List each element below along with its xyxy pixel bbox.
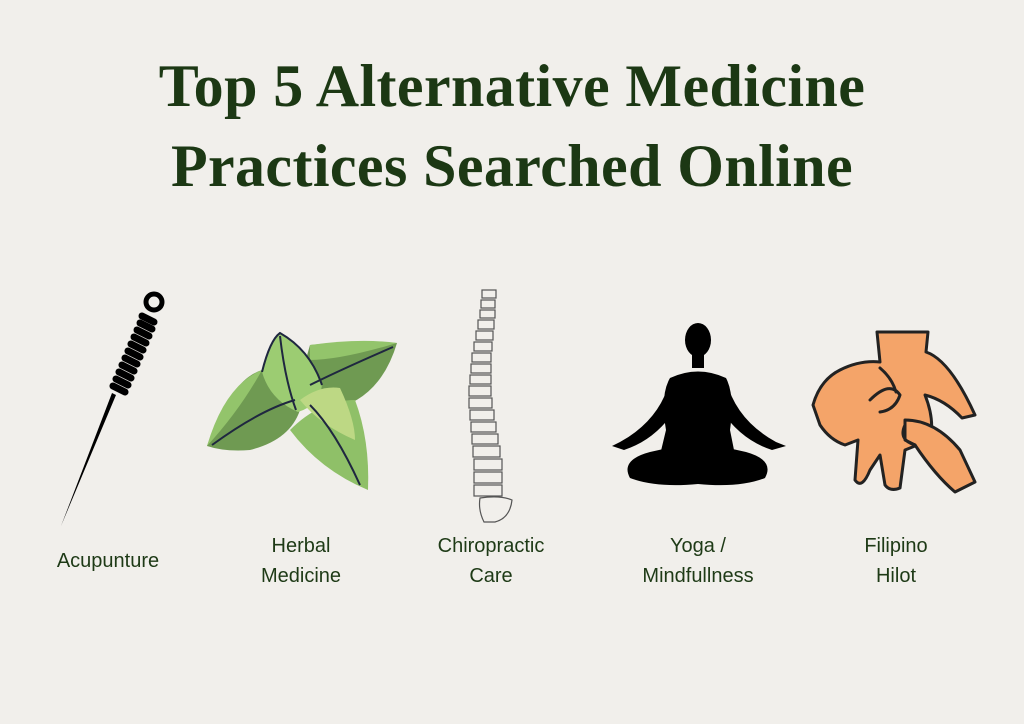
label: herbal medicine: Medicine (261, 565, 341, 587)
title (159, 53, 865, 199)
icon: spine (469, 290, 512, 522)
label: filipino hilot: Filipino (864, 535, 928, 557)
icon: yoga silhouette (612, 323, 786, 485)
icon: hilot hands (813, 332, 975, 492)
title: Practices Searched Online (171, 133, 853, 199)
label: yoga: Yoga / (670, 535, 726, 557)
icon: herbal leaves (207, 333, 397, 490)
label: filipino hilot: Hilot (876, 565, 916, 587)
label: herbal medicine (261, 535, 341, 587)
label: yoga (642, 535, 754, 587)
label: acupuncture: Acupunture (57, 550, 159, 572)
title: Top 5 Alternative Medicine (159, 53, 865, 119)
label: chiropractic care: Chiropractic (438, 535, 544, 557)
label: yoga: Mindfullness (642, 565, 754, 587)
label: filipino hilot (864, 535, 928, 587)
label: chiropractic care (438, 535, 544, 587)
icon: acupuncture needle (61, 294, 162, 526)
label: herbal medicine: Herbal (272, 535, 330, 557)
label: chiropractic care: Care (469, 565, 513, 587)
